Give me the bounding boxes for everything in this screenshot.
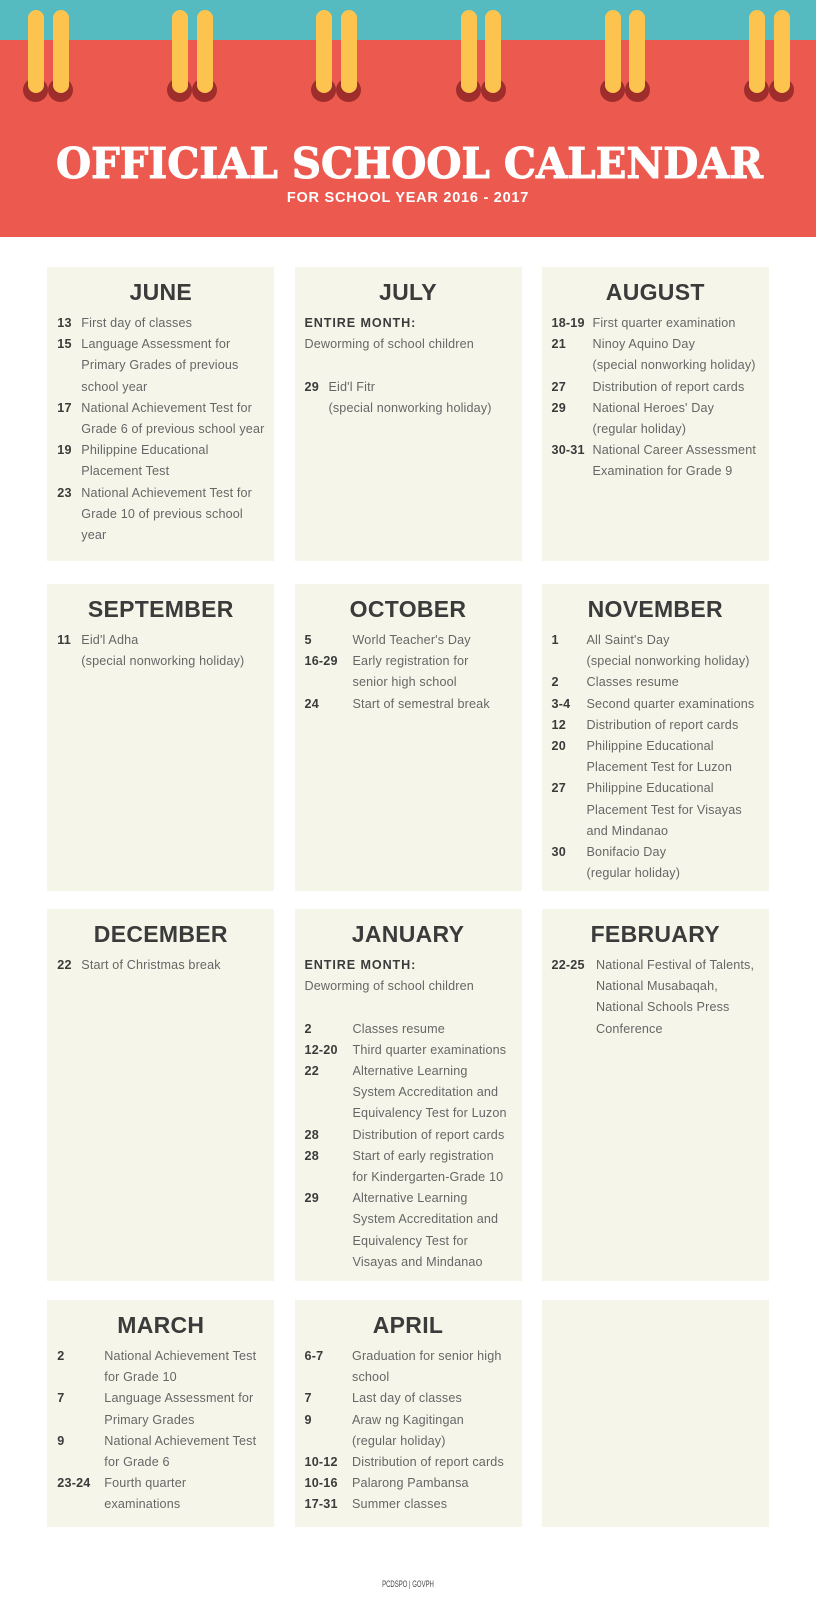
events: September: Eid'l Adha [81, 633, 138, 647]
events: June: 17 [57, 401, 72, 415]
events: April: 10-12 [304, 1455, 338, 1469]
icon: binder ring 6 [744, 10, 794, 102]
events: January: Alternative Learning [352, 1064, 468, 1078]
events: November: 20 [552, 739, 566, 753]
events: April: 9 [304, 1413, 312, 1427]
events: October: World Teacher's Day [352, 633, 471, 647]
panel: July [294, 267, 522, 560]
events: January: 12-20 [304, 1043, 338, 1057]
events: April: Graduation for senior high [352, 1349, 502, 1363]
events: November: All Saint's Day [586, 633, 670, 647]
events: April: (regular holiday) [352, 1434, 446, 1448]
icon: binder ring 5 [600, 10, 650, 102]
events: October: 24 [304, 697, 319, 711]
panel: April [294, 1300, 522, 1527]
events: March: Language Assessment for [104, 1391, 253, 1405]
events: August [552, 316, 756, 478]
events: March: for Grade 10 [104, 1370, 177, 1384]
panel: March [47, 1300, 274, 1527]
events: August: (regular holiday) [592, 422, 686, 436]
panel: January [294, 909, 522, 1281]
events: January: for Kindergarten-Grade 10 [352, 1170, 503, 1184]
events: March [57, 1349, 256, 1511]
events: September: 11 [57, 633, 71, 647]
heading: January: JANUARY [352, 921, 464, 947]
events: October [304, 633, 490, 711]
events: July [304, 316, 492, 415]
events: November: 1 [552, 633, 559, 647]
events: June: 19 [57, 443, 72, 457]
events: June: Placement Test [81, 464, 169, 478]
events: October: senior high school [352, 675, 457, 689]
heading: September: SEPTEMBER [88, 596, 234, 622]
events: June: Philippine Educational [81, 443, 209, 457]
panel: June [47, 267, 274, 560]
events: September: (special nonworking holiday) [81, 654, 244, 668]
icon: binder ring 2 [167, 10, 217, 102]
events: June: 13 [57, 316, 72, 330]
heading: October: OCTOBER [350, 596, 466, 622]
events: April [304, 1349, 504, 1511]
events: November: Philippine Educational [586, 739, 714, 753]
heading: March: MARCH [117, 1312, 204, 1338]
events: June: year [81, 528, 106, 542]
events: July: Deworming of school children [304, 337, 474, 351]
events: January: 2 [304, 1022, 312, 1036]
events: November: Second quarter examinations [586, 697, 754, 711]
events: January: Visayas and Mindanao [352, 1255, 483, 1269]
events: March: 9 [57, 1434, 65, 1448]
panel: September [47, 584, 274, 891]
heading: June: JUNE [130, 279, 192, 305]
events: August: National Career Assessment [592, 443, 756, 457]
events: December: 22 [57, 958, 72, 972]
heading: April: APRIL [373, 1312, 443, 1338]
events: June: Language Assessment for [81, 337, 230, 351]
heading: November: NOVEMBER [588, 596, 723, 622]
events: January: Equivalency Test for [352, 1234, 468, 1248]
events: January: Third quarter examinations [352, 1043, 506, 1057]
events: February: National Musabaqah, [596, 979, 718, 993]
events: October: 5 [304, 633, 312, 647]
events: October: Early registration for [352, 654, 468, 668]
subtitle: FOR SCHOOL YEAR 2016 - 2017 [287, 190, 529, 206]
events: June: 15 [57, 337, 72, 351]
events: November: 2 [552, 675, 559, 689]
events: November: and Mindanao [586, 824, 668, 838]
events: August: 18-19 [552, 316, 585, 330]
events: November: 3-4 [552, 697, 570, 711]
events: July: 29 [304, 380, 319, 394]
events: January: System Accreditation and [352, 1212, 498, 1226]
events: August: National Heroes' Day [592, 401, 714, 415]
panel: February [542, 909, 769, 1281]
events: April: Last day of classes [352, 1391, 462, 1405]
events: March: Primary Grades [104, 1413, 195, 1427]
events: January: Distribution of report cards [352, 1128, 504, 1142]
heading: July: JULY [379, 279, 437, 305]
events: June: Grade 10 of previous school [81, 507, 243, 521]
events: June: Grade 6 of previous school year [81, 422, 264, 436]
events: October: 16-29 [304, 654, 338, 668]
events: March: for Grade 6 [104, 1455, 170, 1469]
events: February: National Schools Press [596, 1000, 730, 1014]
events: March: Fourth quarter [104, 1476, 186, 1490]
events: November: Classes resume [586, 675, 679, 689]
events: January: Deworming of school children [304, 979, 474, 993]
events: November: Distribution of report cards [586, 718, 738, 732]
events: August: 30-31 [552, 443, 585, 457]
events: August: 27 [552, 380, 566, 394]
events: November [552, 633, 754, 880]
icon: binder ring 4 [456, 10, 506, 102]
events: June: Primary Grades of previous [81, 358, 238, 372]
events: March: 23-24 [57, 1476, 91, 1490]
events: March: National Achievement Test [104, 1349, 256, 1363]
events: January: Alternative Learning [352, 1191, 468, 1205]
events: January: Classes resume [352, 1022, 445, 1036]
events: November: 30 [552, 845, 566, 859]
events: June: 23 [57, 486, 72, 500]
footer credit: PCDSPO | GOVPH [382, 1579, 434, 1590]
events: January: Start of early registration [352, 1149, 494, 1163]
icon: binder ring 3 [311, 10, 361, 102]
events: June: National Achievement Test for [81, 401, 252, 415]
events: January: ENTIRE MONTH: [304, 958, 416, 972]
events: April: Palarong Pambansa [352, 1476, 469, 1490]
icon: binder ring 1 [23, 10, 73, 102]
events: July: ENTIRE MONTH: [304, 316, 416, 330]
teal top strip [0, 0, 816, 40]
events: August: Ninoy Aquino Day [592, 337, 695, 351]
events: June: school year [81, 380, 147, 394]
events: February [552, 958, 754, 1036]
events: April: 17-31 [304, 1497, 338, 1511]
events: April: 7 [304, 1391, 312, 1405]
events: April: Distribution of report cards [352, 1455, 504, 1469]
heading: December: DECEMBER [94, 921, 228, 947]
events: August: 29 [552, 401, 566, 415]
events: March: National Achievement Test [104, 1434, 256, 1448]
events: April: 10-16 [304, 1476, 338, 1490]
panel: November [542, 584, 769, 891]
panel: empty [542, 1300, 769, 1527]
events: July: Eid'l Fitr [328, 380, 375, 394]
events: January [304, 958, 507, 1269]
panel: December [47, 909, 274, 1281]
events: November: Bonifacio Day [586, 845, 666, 859]
events: February: Conference [596, 1022, 663, 1036]
events: March: 2 [57, 1349, 65, 1363]
events: August: Examination for Grade 9 [592, 464, 732, 478]
events: August: (special nonworking holiday) [592, 358, 756, 372]
events: June [57, 316, 264, 542]
events: August: 21 [552, 337, 566, 351]
events: November: Placement Test for Visayas [586, 803, 742, 817]
events: January: System Accreditation and [352, 1085, 498, 1099]
events: January: 28 [304, 1149, 319, 1163]
events: November: Placement Test for Luzon [586, 760, 732, 774]
events: April: 6-7 [304, 1349, 323, 1363]
events: October: Start of semestral break [352, 697, 490, 711]
events: August: Distribution of report cards [592, 380, 744, 394]
events: September [57, 633, 244, 668]
events: February: National Festival of Talents, [596, 958, 754, 972]
events: April: Araw ng Kagitingan [352, 1413, 464, 1427]
events: November: Philippine Educational [586, 781, 714, 795]
events: August: First quarter examination [592, 316, 736, 330]
panel: August [542, 267, 769, 560]
events: July: (special nonworking holiday) [328, 401, 492, 415]
events: June: National Achievement Test for [81, 486, 252, 500]
events: March: examinations [104, 1497, 180, 1511]
events: February: 22-25 [552, 958, 585, 972]
events: November: 27 [552, 781, 566, 795]
events: June: First day of classes [81, 316, 192, 330]
events: January: 28 [304, 1128, 319, 1142]
events: November: 12 [552, 718, 566, 732]
events: March: 7 [57, 1391, 65, 1405]
header banner [0, 0, 816, 237]
events: December: Start of Christmas break [81, 958, 221, 972]
panel: October [294, 584, 522, 891]
events: April: Summer classes [352, 1497, 447, 1511]
events: April: school [352, 1370, 389, 1384]
heading: August: AUGUST [606, 279, 705, 305]
events: January: 29 [304, 1191, 319, 1205]
heading: February: FEBRUARY [591, 921, 720, 947]
events: January: Equivalency Test for Luzon [352, 1106, 507, 1120]
events: November: (special nonworking holiday) [586, 654, 750, 668]
events: January: 22 [304, 1064, 319, 1078]
events: November: (regular holiday) [586, 866, 680, 880]
